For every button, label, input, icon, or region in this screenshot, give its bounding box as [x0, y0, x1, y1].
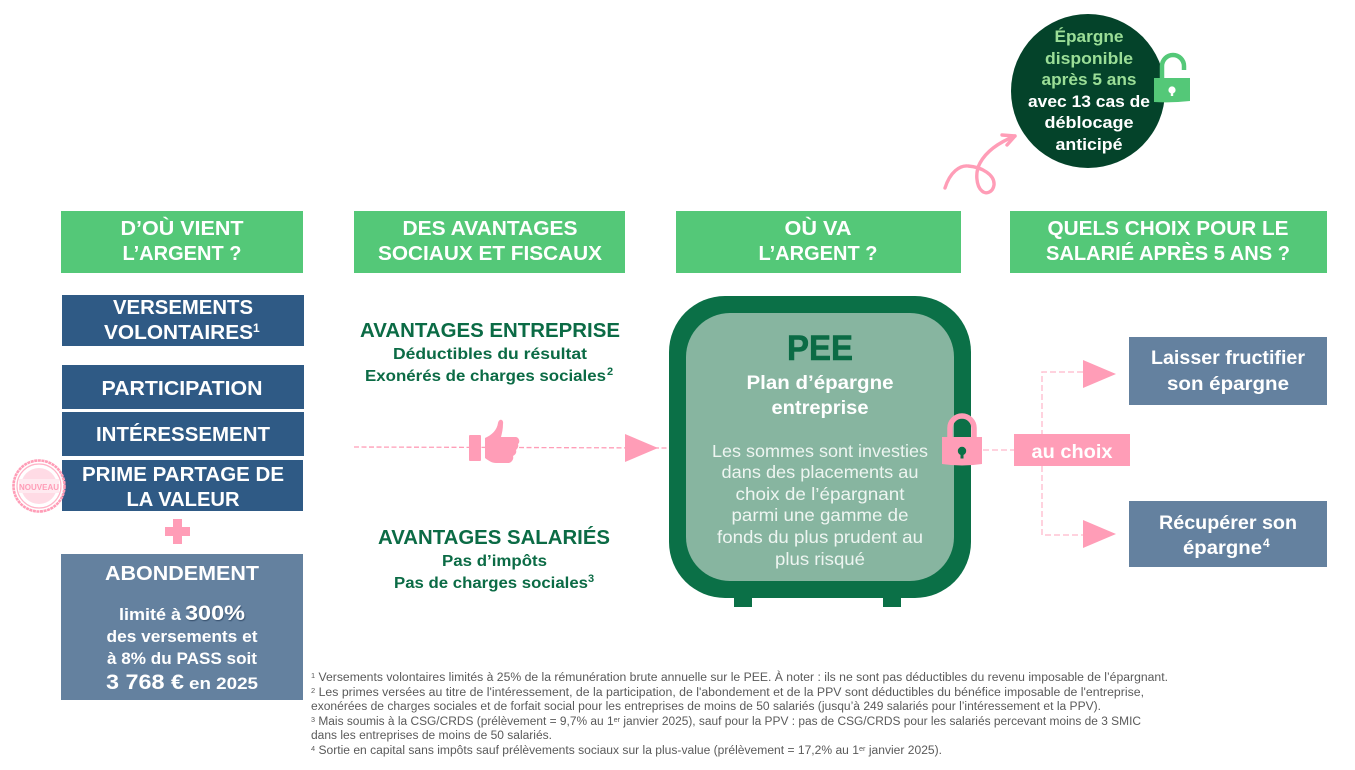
- heading: avantages sociaux et fiscaux: SOCIAUX ET FISCAUX: [378, 243, 603, 265]
- label: au choix: au choix: [1032, 442, 1113, 463]
- box: abondement: 3 768 €: [106, 671, 184, 694]
- box: versements volontaires: [62, 295, 304, 346]
- arrow: dashed arrow from thumb to safe: [354, 434, 669, 462]
- icon: pink closed padlock: [942, 416, 982, 466]
- panel: PEE safe: Les sommes sont investies: [712, 441, 928, 461]
- circle callout: savings availability: Épargne: [1054, 27, 1124, 46]
- heading: d'où vient l'argent: [61, 211, 303, 273]
- circle callout: savings availability: [1011, 14, 1165, 168]
- panel: PEE safe: PEE: [787, 329, 853, 368]
- text block: avantages salariés: 3: [588, 573, 594, 585]
- footnotes: dans les entreprises de moins de 50 salariés.: [311, 730, 552, 742]
- panel: PEE safe: Plan d’épargne: [746, 373, 894, 394]
- heading: avantages sociaux et fiscaux: [354, 211, 625, 273]
- box: participation: PARTICIPATION: [102, 378, 262, 400]
- heading: quels choix pour le salarié: [1010, 211, 1327, 273]
- text block: avantages salariés: Pas de charges sociales: [394, 575, 588, 592]
- footnotes: 3: [311, 717, 315, 724]
- text block: avantages entreprise: Déductibles du résultat: [393, 346, 588, 363]
- box: prime partage de la valeur: PRIME PARTAGE DE: [82, 464, 284, 486]
- text block: avantages entreprise: [360, 320, 620, 385]
- text block: avantages salariés: AVANTAGES SALARIÉS: [378, 526, 610, 549]
- footnotes: Sortie en capital sans impôts sauf prélèvements sociaux sur la plus-value (prélèvement = 17,2% au 1: [315, 745, 859, 757]
- panel: PEE safe: plus risqué: [775, 549, 865, 569]
- panel: PEE safe: entreprise: [772, 398, 868, 419]
- circle callout: savings availability: après 5 ans: [1042, 70, 1136, 89]
- box: abondement: en 2025: [189, 674, 258, 693]
- box: intéressement: [62, 412, 304, 456]
- box: laisser fructifier: son épargne: [1167, 374, 1289, 395]
- panel: PEE safe: [669, 296, 971, 607]
- box: abondement: 300%: [185, 602, 245, 625]
- footnotes: janvier 2025).: [866, 745, 942, 757]
- panel: PEE safe: dans des placements au: [722, 462, 918, 482]
- box: récupérer son épargne: épargne: [1183, 538, 1262, 559]
- box: abondement: ABONDEMENT: [105, 563, 259, 585]
- box: versements volontaires: 1: [253, 321, 260, 335]
- arrow: curly pink arrow to callout: [945, 135, 1015, 193]
- footnotes: janvier 2025), sauf pour la PPV : pas de CSG/CRDS pour les salariés percevant moins de 3 SMIC: [620, 716, 1141, 728]
- footnotes: 4: [311, 746, 315, 753]
- arrows: dashed connectors to choices: [983, 360, 1116, 548]
- circle callout: savings availability: déblocage: [1044, 113, 1134, 132]
- label: au choix: [1014, 434, 1130, 466]
- box: abondement: à 8% du PASS soit: [107, 649, 257, 668]
- footnotes: er: [859, 746, 866, 753]
- text block: avantages salariés: Pas d’impôts: [442, 553, 547, 570]
- box: prime partage de la valeur: LA VALEUR: [126, 489, 240, 511]
- box: intéressement: INTÉRESSEMENT: [96, 423, 270, 446]
- icon: plus sign: [165, 519, 190, 544]
- heading: où va l'argent: [676, 211, 961, 273]
- heading: quels choix pour le salarié: QUELS CHOIX POUR LE: [1048, 218, 1288, 240]
- box: récupérer son épargne: [1129, 501, 1327, 567]
- circle callout: savings availability: avec 13 cas de: [1028, 92, 1150, 111]
- box: récupérer son épargne: 4: [1263, 536, 1270, 550]
- box: versements volontaires: VERSEMENTS: [113, 297, 253, 319]
- text block: avantages salariés: [378, 526, 610, 592]
- circle callout: savings availability: anticipé: [1056, 135, 1122, 154]
- box: versements volontaires: VOLONTAIRES: [104, 322, 253, 344]
- box: abondement: des versements et: [106, 627, 258, 646]
- footnotes: Mais soumis à la CSG/CRDS (prélèvement = 9,7% au 1: [315, 716, 614, 728]
- box: laisser fructifier: Laisser fructifier: [1151, 348, 1306, 369]
- box: prime partage de la valeur: [62, 460, 303, 511]
- box: abondement: limité à: [119, 605, 182, 624]
- badge: nouveau: NOUVEAU: [19, 483, 59, 492]
- icon: open green padlock: [1154, 55, 1190, 102]
- heading: où va l'argent: L’ARGENT ?: [758, 243, 878, 265]
- footnotes: exonérées de charges sociales et de forfait social pour les entreprises de moins de 50 salariés (jusqu’à 249 salariés pour l’intéressement et la PPV).: [311, 701, 1101, 713]
- footnotes: 2: [311, 688, 315, 695]
- box: participation: [62, 365, 304, 409]
- panel: PEE safe: choix de l’épargnant: [736, 484, 905, 504]
- heading: avantages sociaux et fiscaux: DES AVANTAGES: [402, 218, 578, 240]
- box: laisser fructifier: [1129, 337, 1327, 405]
- circle callout: savings availability: disponible: [1045, 49, 1133, 68]
- text block: avantages entreprise: 2: [607, 366, 613, 378]
- heading: où va l'argent: OÙ VA: [784, 216, 852, 240]
- footnotes: Versements volontaires limités à 25% de la rémunération brute annuelle sur le PEE. À noter : ils ne sont pas déductibles du revenu imposable de l’épargnant.: [315, 671, 1168, 684]
- badge: nouveau: [14, 460, 64, 512]
- panel: PEE safe: fonds du plus prudent au: [717, 527, 923, 547]
- footnotes: er: [614, 717, 621, 724]
- footnotes: Les primes versées au titre de l'intéressement, de la participation, de l'abondement et de la PPV sont déductibles du bénéfice imposable de l'entreprise,: [315, 687, 1144, 699]
- heading: d'où vient l'argent: D’OÙ VIENT: [120, 216, 244, 240]
- box: abondement: [61, 554, 303, 700]
- heading: d'où vient l'argent: L’ARGENT ?: [122, 243, 242, 265]
- panel: PEE safe: parmi une gamme de: [732, 505, 908, 525]
- heading: quels choix pour le salarié: SALARIÉ APRÈS 5 ANS ?: [1046, 242, 1290, 265]
- icon: thumb up: [469, 420, 519, 463]
- text block: avantages entreprise: Exonérés de charges sociales: [365, 368, 606, 385]
- footnotes: [311, 671, 1168, 757]
- box: récupérer son épargne: Récupérer son: [1159, 513, 1297, 534]
- footnotes: 1: [311, 673, 315, 680]
- text block: avantages entreprise: AVANTAGES ENTREPRISE: [360, 320, 620, 342]
